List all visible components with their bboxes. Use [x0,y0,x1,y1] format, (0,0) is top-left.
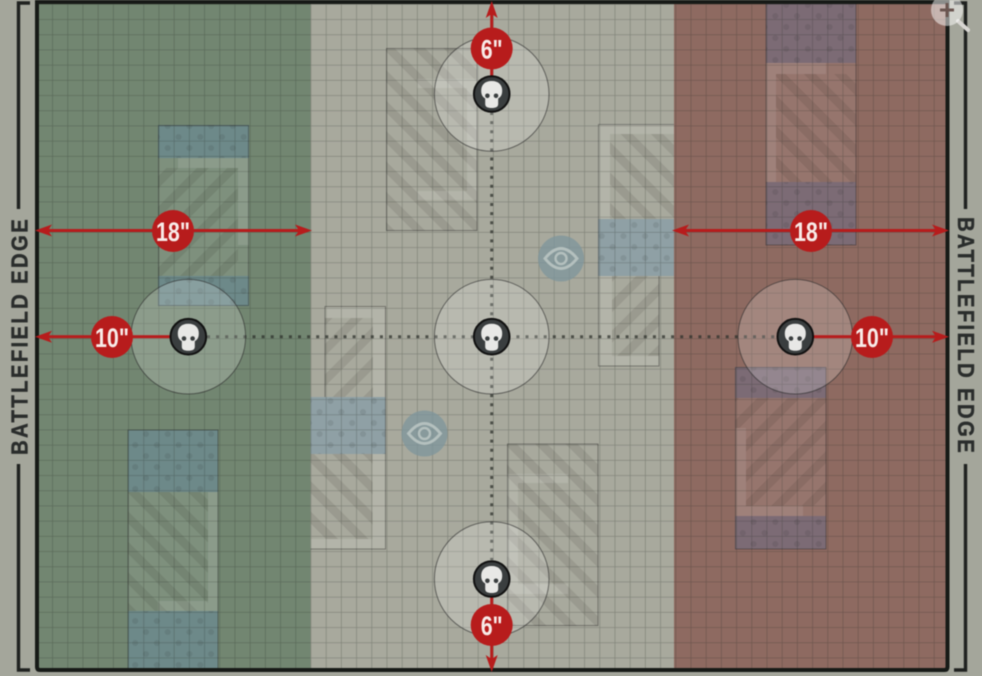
badge: right 10 inch [851,316,893,358]
arrow: right 10 inch [808,331,949,343]
arrow: right 18 inch [672,224,949,236]
terrain: centre bottom [507,444,598,626]
badge: right 18 inch: 18" [794,217,828,247]
terrain: left lower [128,430,218,670]
badge: right 10 inch: 10" [855,323,889,353]
objective marker: left [170,319,206,354]
badge: left 18 inch: 18" [156,217,190,247]
terrain: centre top [386,48,477,231]
label: right battlefield edge: BATTLEFIELD EDGE [953,217,979,455]
label: left battlefield edge: BATTLEFIELD EDGE [6,217,32,455]
arrow: left 18 inch [35,224,312,236]
left edge bracket [18,3,30,670]
objective marker: centre [474,319,510,354]
badge: right 18 inch [790,210,832,252]
objective marker: right [778,319,813,354]
terrain: right upper [766,3,856,245]
terrain: centre left [311,306,386,549]
deployment zone: red [674,2,948,671]
terrain: centre right [598,124,674,366]
dotted centre lines [207,112,776,560]
deployment zone: green [37,2,311,671]
badge: top 6 inch: 6" [481,34,503,64]
arrow: left 10 inch [35,331,176,343]
objective marker: bottom [474,561,510,597]
icon: eye upper [538,236,584,282]
icon: zoom magnifier [931,0,968,30]
badge: left 18 inch [152,210,194,252]
badge: left 10 inch: 10" [95,323,129,353]
objective zones [131,37,853,636]
right edge bracket [954,3,966,670]
badge: bottom 6 inch [471,604,513,646]
no man's land: centre [311,2,674,671]
icon: eye lower [402,410,448,456]
objective marker: top [474,76,510,112]
terrain: right lower [735,367,826,549]
terrain: left upper [158,125,249,306]
badge: bottom 6 inch: 6" [481,611,503,641]
arrow: top 6 inch [486,1,498,78]
badge: left 10 inch [91,316,133,358]
badge: top 6 inch [471,28,513,70]
arrow: bottom 6 inch [486,590,498,672]
